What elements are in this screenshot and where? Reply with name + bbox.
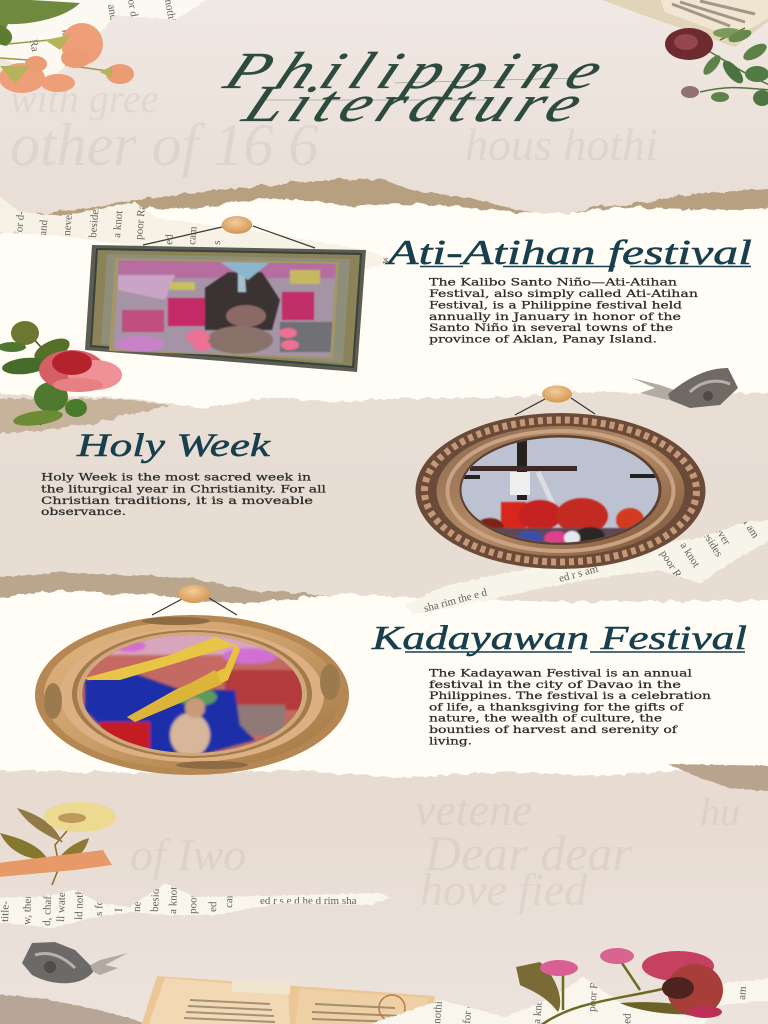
faint handwriting background [10, 76, 740, 915]
torn book page: middle right strip: poor Ra [657, 548, 686, 584]
torn kraft strip: left of holy week [0, 398, 170, 437]
heading: Ati-Atihan festival: Ati-Atihan festival [385, 233, 752, 272]
text block: Ati-Atihan description: province of Aklan, Panay Island. [429, 334, 657, 346]
torn book page: top left: knot [59, 28, 74, 50]
torn book page: upper strip: besides [87, 205, 102, 238]
torn book page: upper strip: ed [163, 233, 176, 245]
open book: top right [597, 0, 768, 47]
text block: Kadayawan description: festival in the city of Davao in the [429, 679, 681, 691]
torn book page: upper strip [0, 193, 397, 270]
faint handwriting background: hove fied [420, 864, 588, 915]
torn book page: upper strip: for d- [13, 210, 27, 236]
torn book page: lower left strip: ed [207, 901, 219, 912]
text block: Ati-Atihan description: Festival, is a Philippine festival held [429, 300, 682, 312]
text block: Kadayawan description: of life, a thanksgiving for the gifts of [429, 702, 684, 714]
hanging pin and cord: frame three [152, 585, 237, 615]
butterfly: lower left [22, 942, 128, 983]
torn book page: upper strip: a knot [111, 210, 125, 238]
text block: Holy Week description: observance. [41, 506, 126, 518]
torn book page: upper strip: s [211, 240, 223, 245]
torn kraft strip: upper [38, 179, 768, 222]
torn book page: top left: Ra [27, 38, 41, 53]
torn book page: top left [0, 0, 215, 80]
torn book page: lower left strip [0, 878, 390, 928]
torn book page: lower left strip: never [131, 887, 144, 912]
torn book page: middle right strip [405, 517, 768, 615]
flower: dried yellow sprig with tape [0, 802, 116, 885]
text block: Holy Week description: Christian traditions, it is a moveable [41, 495, 313, 507]
text block: Ati-Atihan description: Festival, also simply called Ati-Atihan [429, 288, 698, 300]
faint handwriting background: Dear dear [424, 825, 632, 881]
title [215, 41, 613, 133]
torn book page: middle right strip: never [709, 520, 733, 548]
torn book page: bottom right strip: nothi [431, 1001, 445, 1024]
torn book page: lower left strip: w, there [21, 890, 34, 925]
faint handwriting background: vetene [415, 784, 532, 835]
faint handwriting background: with gree [10, 76, 158, 121]
text block: Holy Week description: Holy Week is the most sacred week in [41, 472, 311, 484]
torn book page: upper strip: w [379, 255, 392, 264]
picture frame: Ati-Atihan [85, 245, 366, 372]
torn book page: bottom right strip: a knot [531, 996, 545, 1024]
torn book page: bottom right strip: for d [461, 1002, 475, 1024]
text block: Ati-Atihan description: Santo Niño in several towns of the [429, 322, 673, 334]
torn book page: top left: and [105, 3, 120, 22]
torn book page: lower left strip: s for d [93, 887, 106, 916]
open book: bottom [141, 976, 435, 1024]
torn book page: bottom right strip: poor Ra [586, 976, 601, 1012]
faint handwriting background: hu [700, 789, 740, 834]
torn book page: lower left strip: d, chaffir [41, 885, 54, 926]
faint handwriting background: of Iwo [130, 829, 246, 880]
title: Philippine [215, 41, 613, 100]
text block: Kadayawan description: Philippines. The festival is a celebration [429, 690, 711, 702]
text block: Ati-Atihan description: The Kalibo Santo Niño—Ati-Atihan [429, 276, 677, 288]
torn book page: middle right strip: ed r s am [558, 563, 600, 585]
heading: Holy Week: Holy Week [76, 428, 272, 464]
hanging pin and cord: frame one [143, 216, 315, 248]
torn book page: upper strip: poor Ra [133, 204, 148, 240]
torn book page: bottom right strip [353, 976, 768, 1024]
text block: Kadayawan description: nature, the wealth of culture, the [429, 712, 662, 724]
text block: Kadayawan description: living. [429, 736, 472, 748]
torn book page: bottom right strip: am [736, 985, 749, 1000]
cream band: first section [0, 198, 768, 408]
torn book page: lower left strip: ll water [55, 888, 68, 922]
torn book page: upper strip: and [37, 219, 50, 236]
festival photo: masked dancer [113, 260, 336, 357]
torn book page: lower left strip: poor Ra [187, 878, 200, 914]
torn book page: lower left strip: besides [149, 879, 162, 912]
text block: Ati-Atihan description: annually in January in honor of the [429, 311, 681, 323]
torn book page: bottom right strip: ed [621, 1012, 634, 1024]
faint handwriting background: hous hothi [465, 119, 658, 170]
torn book page: lower left strip: ld nothi [73, 886, 86, 920]
torn book page: lower left strip: cam [223, 889, 236, 908]
torn book page: middle right strip: sha rim the e d [423, 586, 489, 615]
flower: left rose with leaves [0, 321, 122, 428]
text block: Holy Week description: the liturgical year in Christianity. For all [41, 484, 327, 496]
faint handwriting background: other of 16 6 [10, 112, 318, 178]
flower: top left orange sprig [0, 0, 134, 93]
oval frame: Holy Week [416, 413, 706, 569]
torn kraft strip: middle [0, 572, 335, 604]
oval frame: Kadayawan [35, 615, 349, 775]
festival photo: Kadayawan dancer [80, 633, 305, 757]
torn kraft strip: bottom left [0, 993, 162, 1024]
torn book page: upper strip: cam [186, 226, 200, 245]
flower: bottom right pink sprig [516, 948, 723, 1024]
torn book page: upper strip: never [61, 211, 75, 236]
text block: Kadayawan description: The Kadayawan Festival is an annual [429, 668, 693, 680]
butterfly: upper right [632, 368, 738, 408]
title: Literature [234, 74, 592, 133]
flower: top right dark rose with leaves [665, 27, 768, 106]
torn book page: lower left strip: a knot [167, 886, 180, 914]
heading: Kadayawan Festival: Kadayawan Festival [371, 620, 747, 657]
torn book page: middle right strip: I am [740, 517, 761, 541]
torn kraft strip: right of third section [668, 764, 768, 793]
torn book page: lower left strip: I am [113, 891, 126, 912]
torn book page: middle right strip: besides [697, 525, 725, 559]
text block: Kadayawan description: bounties of harvest and serenity of [429, 724, 678, 736]
hanging pin and cord: frame two [515, 386, 595, 415]
festival photo: crucifixion reenactment [462, 438, 658, 542]
torn book page: middle right strip: a knot [677, 540, 702, 570]
cream band: third section [0, 591, 768, 778]
torn book page: lower left strip: ed r s e d he d rim sha [260, 895, 357, 907]
